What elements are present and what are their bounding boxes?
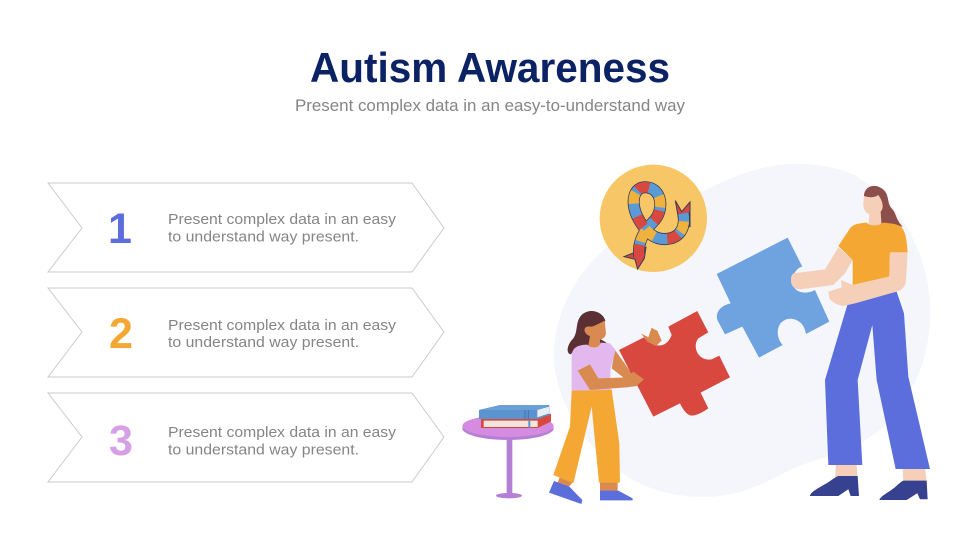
- red book: [481, 414, 551, 428]
- blue book: [479, 405, 549, 419]
- illustration: table with books: [462, 405, 554, 498]
- shoes: [549, 481, 633, 504]
- front arm: [828, 252, 908, 306]
- icon: awareness ribbon badge: [600, 165, 707, 272]
- ankles: [835, 463, 927, 482]
- shirt: [572, 343, 616, 391]
- illustration: woman: [791, 186, 930, 500]
- number 3: 3: [109, 417, 133, 465]
- shirt: [838, 223, 908, 285]
- red puzzle piece: [619, 311, 730, 417]
- panel: step 2: [48, 288, 444, 377]
- text: step 1: to understand way present.: [168, 228, 359, 246]
- neck and head: [863, 195, 883, 227]
- hair: [568, 311, 610, 354]
- title: Autism Awareness: [310, 44, 670, 91]
- neck and head: [584, 321, 606, 348]
- trousers: [825, 292, 930, 469]
- text: step 1: Present complex data in an easy: [168, 211, 397, 228]
- text: step 3: to understand way present.: [168, 442, 359, 458]
- front arm: [578, 364, 644, 390]
- illustration: girl: [549, 311, 730, 504]
- ankles: [557, 477, 618, 492]
- trousers: [553, 389, 620, 483]
- text: step 2: Present complex data in an easy: [168, 317, 397, 334]
- icon: blue puzzle piece: [717, 238, 829, 358]
- background blob: [554, 164, 930, 497]
- panel: step 1: [48, 183, 444, 272]
- shoes: [810, 476, 928, 500]
- text: step 2: to understand way present.: [168, 334, 359, 351]
- rear arm: [791, 247, 853, 289]
- number 2: 2: [109, 310, 133, 358]
- rear arm: [612, 350, 632, 380]
- hair: [864, 186, 903, 227]
- table: [507, 437, 512, 495]
- subtitle: Present complex data in an easy-to-understand way: [295, 96, 685, 115]
- number 1: 1: [108, 205, 132, 253]
- text: step 3: Present complex data in an easy: [168, 424, 397, 441]
- panel: step 3: [48, 393, 444, 482]
- upper hand: [641, 328, 662, 346]
